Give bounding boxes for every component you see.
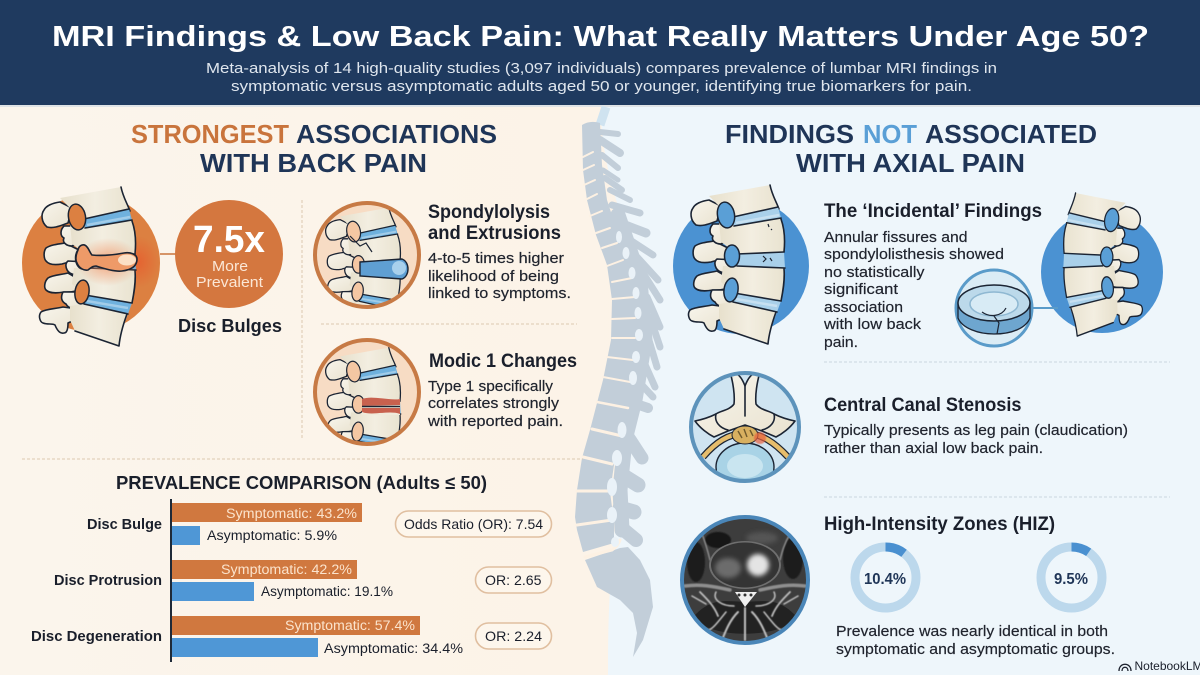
text: prevalence note: symptomatic and asymptomatic groups. bbox=[836, 641, 1115, 658]
row: disc bulge: Disc Bulge bbox=[87, 517, 162, 533]
text: spondylolysis bbox=[428, 202, 571, 302]
text: prevalence note: Prevalence was nearly identical in both bbox=[836, 623, 1108, 640]
row: disc degeneration: Symptomatic: 57.4% bbox=[285, 618, 415, 633]
row: disc degeneration: Disc Degeneration bbox=[31, 629, 162, 645]
text: incidental findings: Annular fissures and bbox=[824, 229, 968, 246]
subtitle bbox=[206, 60, 997, 95]
text: modic: Modic 1 Changes bbox=[429, 351, 577, 372]
icon: axial MRI scan bbox=[682, 517, 808, 643]
heading: high-intensity zones: High-Intensity Zones (HIZ) bbox=[824, 514, 1055, 535]
text: prevalence note bbox=[836, 623, 1115, 658]
heading: findings not associated: WITH AXIAL PAIN bbox=[796, 148, 1025, 178]
text: incidental findings: with low back bbox=[823, 316, 922, 333]
icon: incidental spine left bbox=[673, 185, 809, 344]
text: incidental findings: association bbox=[824, 299, 903, 316]
heading: findings not associated: ASSOCIATED bbox=[925, 119, 1097, 149]
text: spondylolysis: linked to symptoms. bbox=[428, 285, 571, 302]
stat circle: 7.5x: 7.5x bbox=[193, 219, 265, 261]
text: modic: Type 1 specifically bbox=[428, 378, 553, 395]
chart axis bbox=[170, 499, 172, 662]
text: central canal stenosis: Central Canal Stenosis bbox=[824, 395, 1022, 416]
central spine silhouette bbox=[575, 107, 660, 657]
row: disc protrusion: OR: 2.65 bbox=[485, 572, 542, 588]
connector line bbox=[1030, 307, 1058, 309]
icon: disc bulge spine bbox=[22, 187, 160, 346]
text: central canal stenosis bbox=[824, 395, 1128, 457]
donut: 9.5%: 9.5% bbox=[1054, 571, 1088, 588]
donut: 10.4% bbox=[855, 547, 916, 608]
row: disc degeneration: Asymptomatic: 34.4% bbox=[324, 641, 463, 656]
text: incidental findings bbox=[823, 201, 1042, 351]
text: incidental findings: no statistically bbox=[824, 264, 925, 281]
header band bbox=[0, 0, 1200, 107]
chart: prevalence comparison bbox=[31, 472, 552, 662]
title: MRI Findings & Low Back Pain: What Really Matters Under Age 50? bbox=[52, 21, 1149, 53]
icon: central canal stenosis bbox=[691, 372, 799, 491]
text: incidental findings: significant bbox=[824, 281, 899, 298]
label: disc bulges: Disc Bulges bbox=[178, 315, 282, 336]
row: disc bulge: Symptomatic: 43.2% bbox=[226, 506, 357, 521]
heading: findings not associated bbox=[725, 119, 1097, 178]
text: modic bbox=[427, 351, 577, 430]
background: right panel bbox=[601, 105, 1200, 675]
row: disc bulge: Odds Ratio (OR): 7.54 bbox=[404, 516, 543, 532]
text: spondylolysis: Spondylolysis bbox=[428, 202, 550, 223]
chart title: PREVALENCE COMPARISON (Adults ≤ 50) bbox=[116, 472, 487, 493]
row: disc protrusion: Disc Protrusion bbox=[54, 573, 162, 589]
icon: spondylolysis bbox=[313, 201, 421, 309]
stat circle: 7.5x: Prevalent bbox=[196, 274, 264, 291]
text: central canal stenosis: rather than axial low back pain. bbox=[824, 440, 1043, 457]
icon: modic 1 bbox=[313, 338, 421, 446]
subtitle: Meta-analysis of 14 high-quality studies (3,097 individuals) compares prevalence of lumbar MRI findings in bbox=[206, 60, 997, 77]
heading: findings not associated: FINDINGS bbox=[725, 119, 854, 149]
donut: 9.5% bbox=[1041, 547, 1102, 608]
text: modic: with reported pain. bbox=[427, 413, 563, 430]
row: disc bulge bbox=[87, 503, 552, 545]
heading: strongest associations: STRONGEST bbox=[131, 119, 289, 149]
heading: strongest associations: ASSOCIATIONS bbox=[296, 119, 497, 149]
heading: strongest associations bbox=[131, 119, 497, 178]
row: disc protrusion: Symptomatic: 42.2% bbox=[221, 562, 352, 577]
text: incidental findings: The ‘Incidental’ Findings bbox=[824, 201, 1042, 222]
text: spondylolysis: likelihood of being bbox=[428, 268, 559, 285]
row: disc protrusion bbox=[54, 560, 552, 601]
donut: 10.4%: 10.4% bbox=[864, 571, 906, 588]
row: disc protrusion: Asymptomatic: 19.1% bbox=[261, 584, 393, 599]
icon: annular fissure disc bbox=[956, 270, 1032, 346]
stat circle: 7.5x bbox=[175, 200, 283, 308]
text: spondylolysis: 4-to-5 times higher bbox=[428, 250, 564, 267]
row: disc degeneration: OR: 2.24 bbox=[485, 628, 542, 644]
text: incidental findings: pain. bbox=[824, 334, 858, 351]
text: central canal stenosis: Typically presents as leg pain (claudication) bbox=[824, 422, 1128, 439]
connector line bbox=[160, 253, 176, 255]
icon: incidental spine right bbox=[1041, 193, 1163, 336]
stat circle: 7.5x: More bbox=[212, 258, 248, 275]
text: spondylolysis: and Extrusions bbox=[428, 223, 561, 244]
heading: strongest associations: WITH BACK PAIN bbox=[200, 148, 427, 178]
row: disc degeneration bbox=[31, 616, 552, 657]
row: disc bulge: Asymptomatic: 5.9% bbox=[207, 528, 337, 543]
text: modic: correlates strongly bbox=[428, 395, 560, 412]
text: incidental findings: spondylolisthesis showed bbox=[824, 246, 1004, 263]
subtitle: symptomatic versus asymptomatic adults aged 50 or younger, identifying true biomarkers for pain. bbox=[231, 78, 972, 95]
heading: findings not associated: NOT bbox=[863, 119, 917, 149]
